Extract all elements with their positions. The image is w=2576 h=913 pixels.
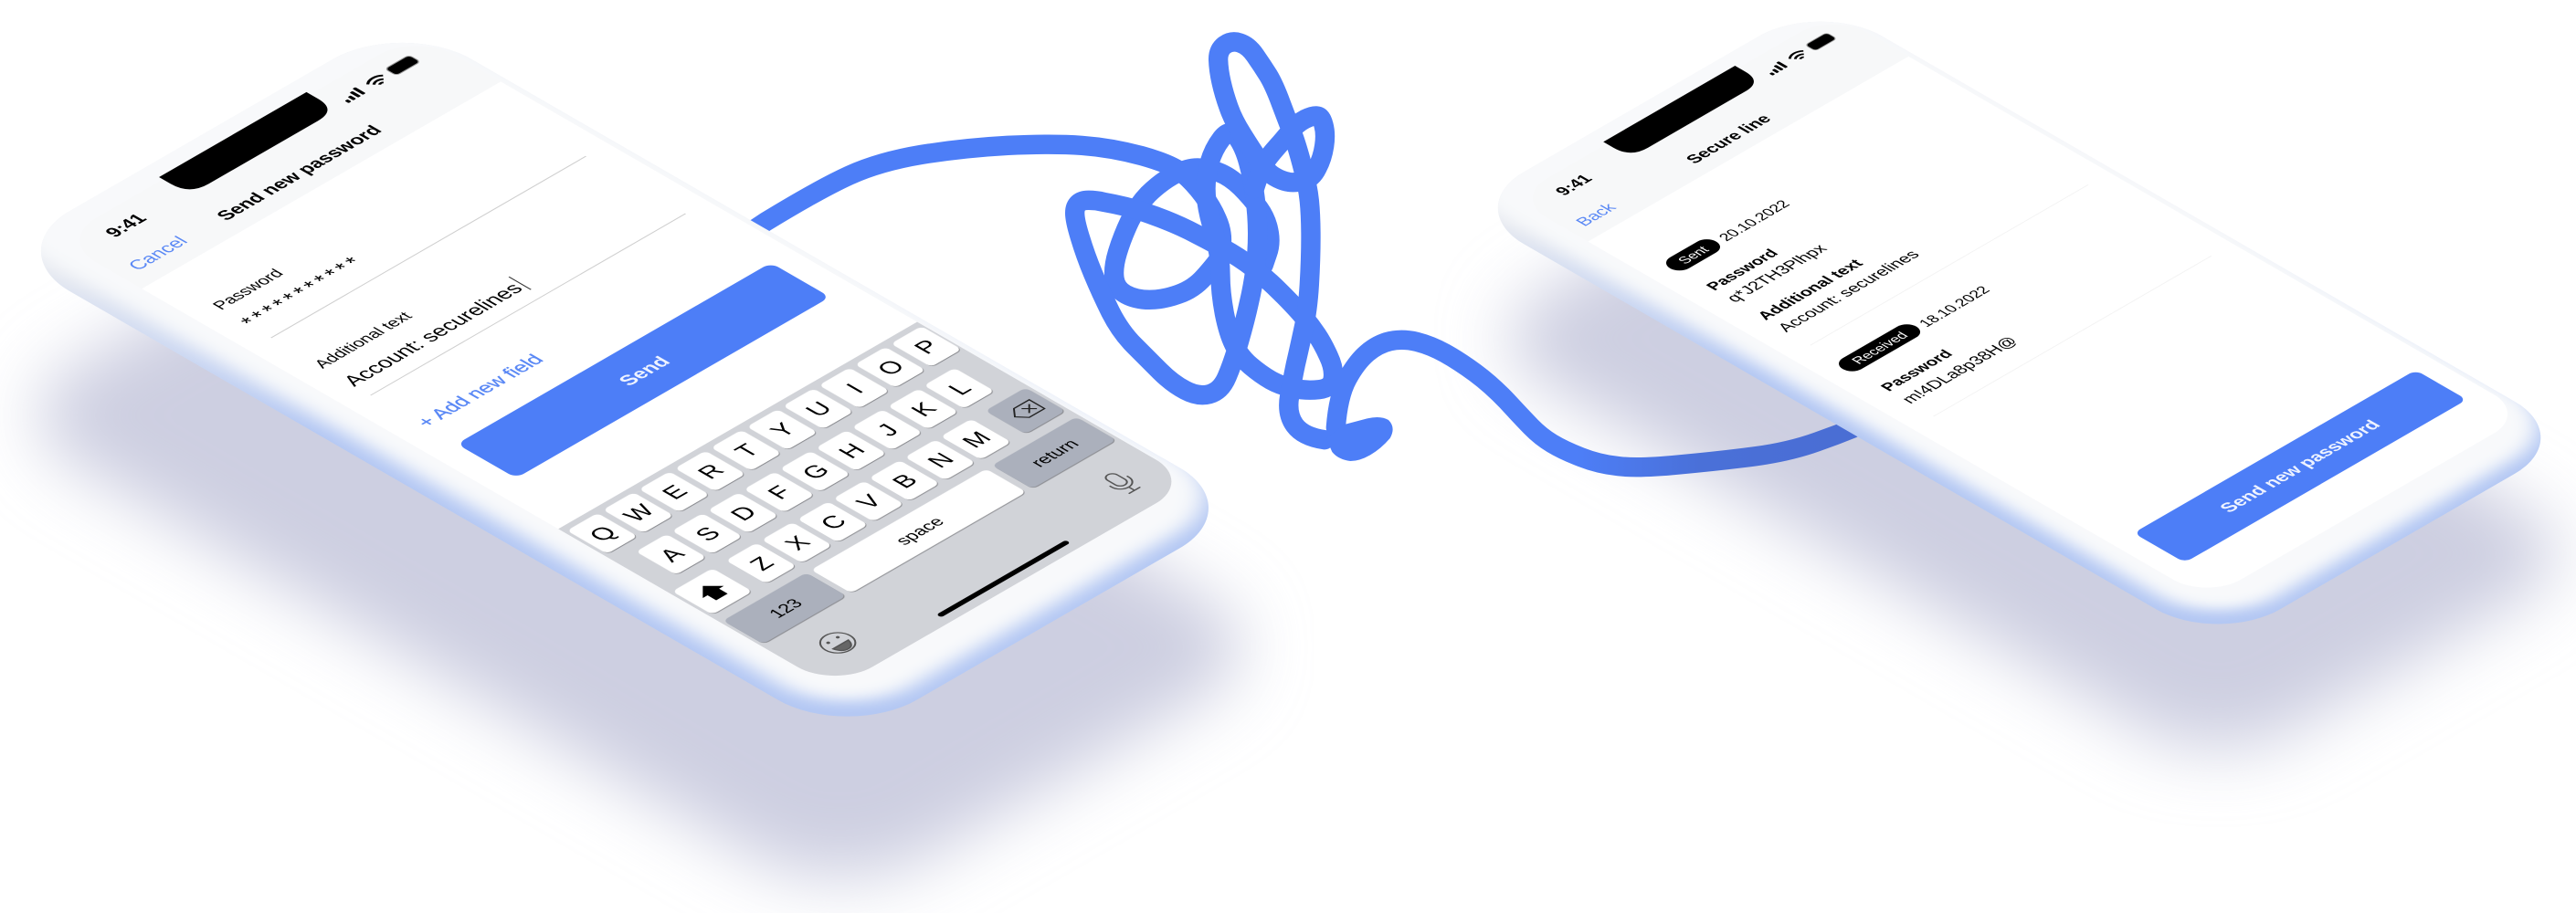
password label: Password xyxy=(208,267,288,312)
key labels: R xyxy=(692,460,730,483)
back link: Back xyxy=(1571,200,1621,228)
icon: battery xyxy=(385,55,420,76)
key labels: Z xyxy=(744,553,780,574)
sent badge: Sent xyxy=(1674,244,1714,267)
additional text value: Account: securelines xyxy=(338,279,528,389)
divider xyxy=(1933,256,2212,416)
additional text label: Additional text xyxy=(310,310,416,371)
key labels: M xyxy=(955,427,998,452)
key labels: H xyxy=(832,440,871,462)
password value: *********** xyxy=(236,254,369,331)
icon: signal xyxy=(338,87,365,103)
key labels: space xyxy=(891,514,949,548)
message: sent xyxy=(1661,184,1924,336)
nav title: Send new password xyxy=(212,122,386,224)
send button: Send xyxy=(613,353,675,389)
field divider 1 xyxy=(270,156,586,338)
key labels: N xyxy=(922,449,960,471)
phone: send new password xyxy=(41,43,1209,716)
screen xyxy=(2230,243,2505,405)
icon: shift xyxy=(692,580,733,603)
key labels: C xyxy=(814,511,853,533)
sent password label: Password xyxy=(1702,247,1782,293)
send button xyxy=(457,263,830,478)
key labels: T xyxy=(728,440,765,461)
sent date: 20.10.2022 xyxy=(1716,198,1794,244)
keyboard xyxy=(558,322,1194,688)
tangled line connecting the phones xyxy=(749,42,1873,467)
shadow: left phone xyxy=(0,155,1290,907)
icon: signal xyxy=(1763,61,1788,76)
screen xyxy=(875,298,917,323)
notch xyxy=(1603,66,1762,158)
keyboard row 4 xyxy=(723,417,1116,644)
key labels: G xyxy=(796,460,836,483)
status time: 9:41 xyxy=(100,211,152,240)
phone body xyxy=(41,43,1209,716)
field divider 2 xyxy=(370,214,686,395)
key labels: return xyxy=(1027,436,1083,470)
key labels: V xyxy=(850,490,888,512)
key labels: X xyxy=(778,532,817,554)
cancel link: Cancel xyxy=(123,234,193,273)
sent badge xyxy=(1661,236,1726,274)
sent additional value: Account: securelines xyxy=(1773,247,1924,334)
status time: 9:41 xyxy=(1550,172,1596,198)
key labels xyxy=(583,336,1099,634)
icon: wifi xyxy=(364,74,389,88)
key labels: P xyxy=(908,336,945,358)
keyboard row 3 xyxy=(672,388,1066,614)
send new password button xyxy=(2134,370,2467,562)
phone: secure line xyxy=(1498,22,2541,624)
key labels: O xyxy=(871,356,911,379)
key labels: L xyxy=(942,378,977,399)
icon: emoji xyxy=(813,628,862,657)
nav title: Secure line xyxy=(1681,111,1775,166)
key labels: F xyxy=(762,482,798,503)
key labels: D xyxy=(724,502,763,524)
sent password value: q*J2TH3Plhpx xyxy=(1722,241,1831,305)
icon: microphone xyxy=(1099,470,1143,496)
received date: 18.10.2022 xyxy=(1916,284,1994,330)
received badge xyxy=(1833,321,1926,374)
send new password button: Send new password xyxy=(2216,417,2385,516)
divider xyxy=(1810,184,2088,345)
received badge: Received xyxy=(1849,330,1912,366)
message: received xyxy=(1833,281,2052,408)
home indicator xyxy=(936,540,1071,617)
phone body xyxy=(1498,22,2541,624)
icon: wifi xyxy=(1787,49,1809,62)
received password label: Password xyxy=(1876,347,1957,394)
notch xyxy=(159,92,337,194)
icon: backspace xyxy=(1008,400,1044,421)
keyboard row 1 xyxy=(567,326,962,554)
key labels: B xyxy=(886,470,924,492)
key labels: A xyxy=(653,544,691,566)
key labels: Y xyxy=(764,419,802,441)
key labels: E xyxy=(656,481,693,503)
key labels: I xyxy=(840,380,870,397)
text cursor xyxy=(509,277,532,289)
key labels: S xyxy=(689,523,726,545)
key labels: Q xyxy=(583,522,623,545)
keyboard row 2 xyxy=(636,368,995,575)
key labels: 123 xyxy=(765,596,808,621)
received password value: m!4DLa8p38H@ xyxy=(1897,334,2022,406)
key labels: U xyxy=(799,398,839,420)
icon: battery xyxy=(1805,33,1837,51)
key labels: J xyxy=(871,420,905,440)
shadow: right phone xyxy=(1466,119,2576,773)
add new field link: + Add new field xyxy=(411,352,548,430)
key labels: K xyxy=(905,398,943,420)
key labels: W xyxy=(617,500,661,526)
sent additional label: Additional text xyxy=(1753,257,1867,322)
